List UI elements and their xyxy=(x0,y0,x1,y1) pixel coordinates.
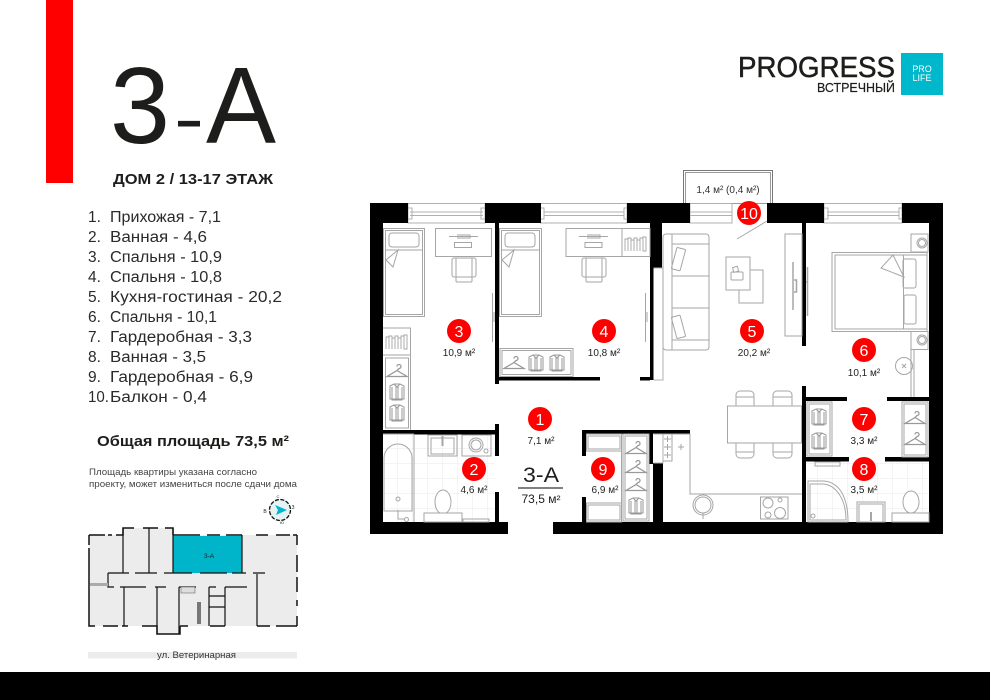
furniture: bathroom 8 xyxy=(808,462,929,522)
room marker 6 xyxy=(848,338,881,379)
title: apartment type xyxy=(110,45,276,167)
logo: Progress: PRO xyxy=(912,64,932,74)
room list: Гардеробная - 6,9 xyxy=(110,369,253,386)
title: apartment type: - xyxy=(174,79,204,159)
balcony xyxy=(684,170,772,204)
room marker 9: 9 xyxy=(599,462,608,479)
room marker 3: 10,9 м² xyxy=(443,348,476,359)
room list: 7. xyxy=(88,329,101,346)
room list: 5. xyxy=(88,289,101,306)
disclaimer note: Площадь квартиры указана согласно xyxy=(89,467,257,478)
room marker 1: 7,1 м² xyxy=(528,436,555,447)
title: apartment type: А xyxy=(206,45,276,167)
room marker 4: 4 xyxy=(600,324,609,341)
street label xyxy=(88,650,297,661)
key plan of the floor xyxy=(89,528,297,634)
highlighted apartment on key plan: 3-А xyxy=(204,553,215,560)
room marker 5: 5 xyxy=(748,324,757,341)
room marker 7: 3,3 м² xyxy=(851,436,878,447)
icon: compass: Ю xyxy=(280,520,284,525)
room marker 10 xyxy=(737,201,761,225)
room marker 2: 2 xyxy=(470,462,479,479)
disclaimer note xyxy=(89,467,298,490)
bottom black band xyxy=(0,672,990,700)
room list: 8. xyxy=(88,349,101,366)
room list: Спальня - 10,9 xyxy=(110,249,222,266)
windows xyxy=(408,204,902,223)
furniture: bedroom 4 xyxy=(500,228,650,376)
service shafts xyxy=(654,268,663,463)
room marker 1 xyxy=(528,407,555,447)
room list: 2. xyxy=(88,229,101,246)
room list: 1. xyxy=(88,209,101,226)
balcony: 1,4 м² (0,4 м²) xyxy=(696,185,760,196)
room marker 4: 10,8 м² xyxy=(588,348,621,359)
central apartment label: 3-А xyxy=(523,464,559,487)
room marker 4 xyxy=(588,319,621,359)
room marker 7 xyxy=(851,407,878,447)
highlighted apartment on key plan xyxy=(173,536,242,573)
room list: 6. xyxy=(88,309,101,326)
room marker 3 xyxy=(443,319,476,359)
icon: compass: С xyxy=(277,494,280,499)
room list: Спальня - 10,1 xyxy=(110,309,217,326)
logo: Progress: PROGRESS xyxy=(738,52,895,84)
room marker 9: 6,9 м² xyxy=(592,485,619,496)
room marker 8: 3,5 м² xyxy=(851,485,878,496)
room list: 4. xyxy=(88,269,101,286)
tiled bathroom floors xyxy=(383,434,929,522)
room marker 6: 10,1 м² xyxy=(848,368,881,379)
furniture: bedroom 6 xyxy=(806,234,928,397)
logo: Progress: ВСТРЕЧНЫЙ xyxy=(817,80,895,95)
furniture: living room and kitchen xyxy=(663,221,802,519)
icon: compass xyxy=(263,494,295,525)
room marker 2 xyxy=(461,457,488,496)
title: apartment type: 3 xyxy=(110,45,170,167)
room marker 3: 3 xyxy=(455,324,464,341)
room list xyxy=(88,209,282,406)
room marker 10: 10 xyxy=(740,206,758,223)
red accent bar xyxy=(46,0,73,183)
central apartment label: 73,5 м² xyxy=(522,494,561,506)
logo: Progress: LIFE xyxy=(912,73,932,83)
room marker 7: 7 xyxy=(860,412,869,429)
room list: Спальня - 10,8 xyxy=(110,269,222,286)
room list: 3. xyxy=(88,249,101,266)
furniture: bedroom 3 xyxy=(383,228,494,430)
room marker 8: 8 xyxy=(860,462,869,479)
room marker 5: 20,2 м² xyxy=(738,348,771,359)
walls xyxy=(370,203,943,534)
room marker 5 xyxy=(738,319,771,359)
subtitle: building and floor: ДОМ 2 / 13-17 ЭТАЖ xyxy=(113,171,273,188)
street label: ул. Ветеринарная xyxy=(157,650,236,661)
room marker 1: 1 xyxy=(536,412,545,429)
room list: Кухня-гостиная - 20,2 xyxy=(110,289,282,306)
floor plan xyxy=(370,170,943,534)
room list: Прихожая - 7,1 xyxy=(110,209,221,226)
room marker 8 xyxy=(851,457,878,496)
room list: Балкон - 0,4 xyxy=(110,389,207,406)
logo: Progress xyxy=(738,52,943,95)
room list: Ванная - 4,6 xyxy=(110,229,207,246)
central apartment label xyxy=(518,464,563,506)
room list: 9. xyxy=(88,369,101,386)
furniture: bathroom 2 xyxy=(383,434,491,522)
room list: 10. xyxy=(88,389,109,406)
icon: compass: В xyxy=(263,509,267,515)
room marker 9 xyxy=(591,457,619,496)
room list: Ванная - 3,5 xyxy=(110,349,206,366)
total area: Общая площадь 73,5 м² xyxy=(97,433,289,450)
furniture: wardrobes 7 and 9 xyxy=(586,402,928,522)
room marker 2: 4,6 м² xyxy=(461,485,488,496)
icon: compass: З xyxy=(291,505,295,511)
room list: Гардеробная - 3,3 xyxy=(110,329,252,346)
disclaimer note: проекту, может измениться после сдачи дома xyxy=(89,479,298,490)
room marker 6: 6 xyxy=(860,343,869,360)
